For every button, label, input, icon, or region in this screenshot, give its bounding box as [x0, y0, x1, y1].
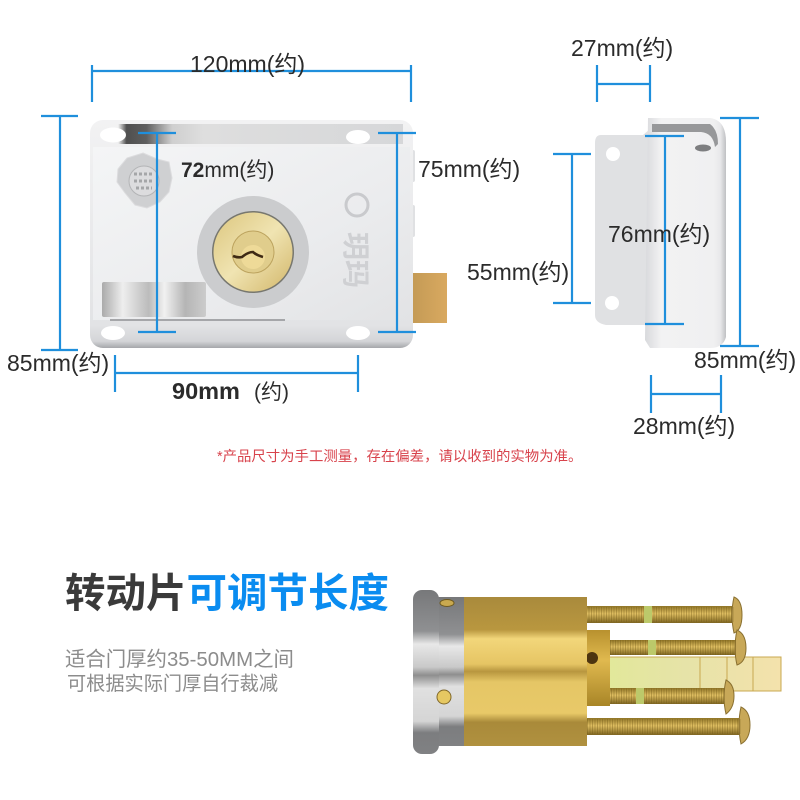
label: 120mm: 120mm(约) [190, 51, 305, 77]
logo mark: 玥玛 [340, 232, 371, 288]
label: 27mm: 27mm(约) [571, 35, 673, 61]
latch roller [102, 282, 206, 317]
dimension: 90mm [115, 355, 358, 392]
description text [65, 648, 294, 695]
label: 28mm: 28mm(约) [633, 413, 735, 439]
measurement note: *产品尺寸为手工测量，存在偏差，请以收到的实物为准。 [217, 448, 582, 465]
dimension: 55mm [553, 154, 591, 303]
tail piece [607, 657, 781, 691]
bracket side view [595, 118, 726, 348]
collar hole [586, 652, 598, 664]
label: 85mm left: 85mm(约) [7, 350, 109, 376]
heading: 转动片可调节长度 [65, 570, 389, 616]
dimension: 85mm left [41, 116, 78, 350]
logo mark [340, 194, 371, 288]
bracket body [645, 118, 726, 348]
lock cylinder photo [413, 590, 781, 754]
face plate [93, 147, 410, 320]
lock bolt [411, 273, 447, 323]
lock front view [90, 120, 447, 348]
flange holes [606, 147, 620, 161]
brass collar [584, 630, 610, 706]
dimension: 85mm right [720, 118, 759, 346]
label: 90mm: (约) [254, 381, 289, 404]
bracket shadow mark [695, 144, 711, 152]
icon: thumb knob [117, 153, 172, 208]
dimension: 27mm [597, 65, 650, 102]
label: 76mm: 76mm(约) [608, 221, 710, 247]
label: 55mm: 55mm(约) [467, 259, 569, 285]
dimension lines [41, 65, 759, 413]
steel barrel [432, 597, 464, 746]
groove line [110, 319, 285, 321]
label: 85mm right: 85mm(约) [694, 347, 796, 373]
label: 75mm: 75mm(约) [418, 156, 520, 182]
dimension: 28mm [651, 375, 721, 413]
upper rim highlight [118, 124, 403, 144]
screws [586, 597, 750, 744]
lock body [90, 120, 413, 348]
dimension: 76mm [645, 136, 684, 324]
side buttons [410, 150, 415, 237]
key cylinder [197, 196, 309, 308]
label: 72mm: 72mm(约) [181, 159, 274, 182]
label: 90mm: 90mm [172, 378, 240, 404]
brass barrel [462, 597, 587, 746]
dimension: 75mm [378, 133, 416, 332]
bracket top rim [652, 124, 718, 147]
brass pins [440, 600, 454, 606]
flange [413, 590, 439, 754]
description text: 适合门厚约35-50MM之间 [65, 648, 294, 671]
mounting flange [595, 129, 650, 325]
dimension: 72mm [138, 133, 176, 332]
description text: 可根据实际门厚自行裁减 [67, 673, 278, 695]
mounting holes [100, 128, 370, 340]
dimension: 120mm [92, 65, 411, 102]
